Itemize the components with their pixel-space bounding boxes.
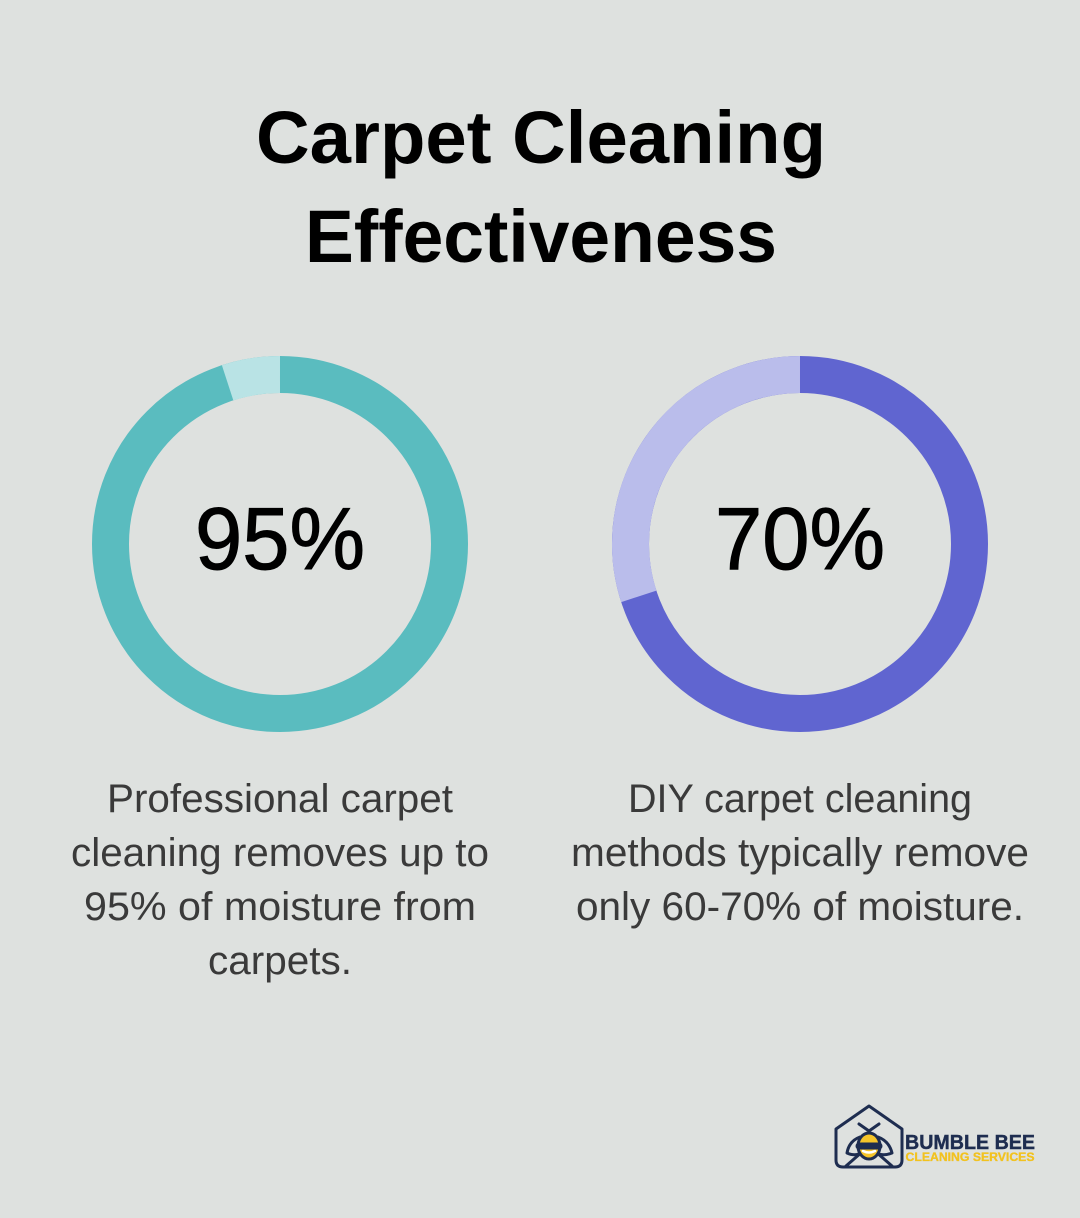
icon: bee in house (836, 1106, 902, 1167)
value: 95%: 95% (195, 489, 365, 588)
description: professional: carpets. (208, 939, 352, 983)
description: professional: Professional carpet (107, 777, 453, 821)
title: Carpet Cleaning (256, 96, 826, 179)
title: Effectiveness (305, 195, 777, 278)
description: professional: 95% of moisture from (84, 885, 476, 929)
logo: Bumble Bee Cleaning Services (836, 1106, 1035, 1167)
title (256, 96, 826, 278)
description: DIY: DIY carpet cleaning (628, 777, 972, 821)
logo tagline: CLEANING SERVICES (906, 1152, 1035, 1164)
panel: professional cleaning (71, 374, 489, 983)
description: professional (71, 777, 489, 983)
description: DIY: methods typically remove (571, 831, 1029, 875)
donut chart: 95% (110, 374, 450, 714)
value: 70%: 70% (715, 489, 885, 588)
description: DIY (571, 777, 1029, 929)
description: DIY: only 60-70% of moisture. (576, 885, 1024, 929)
logo wordmark: BUMBLE BEE (905, 1132, 1035, 1154)
donut chart: 70% (630, 374, 970, 714)
description: professional: cleaning removes up to (71, 831, 489, 875)
panel: DIY cleaning (571, 374, 1029, 929)
